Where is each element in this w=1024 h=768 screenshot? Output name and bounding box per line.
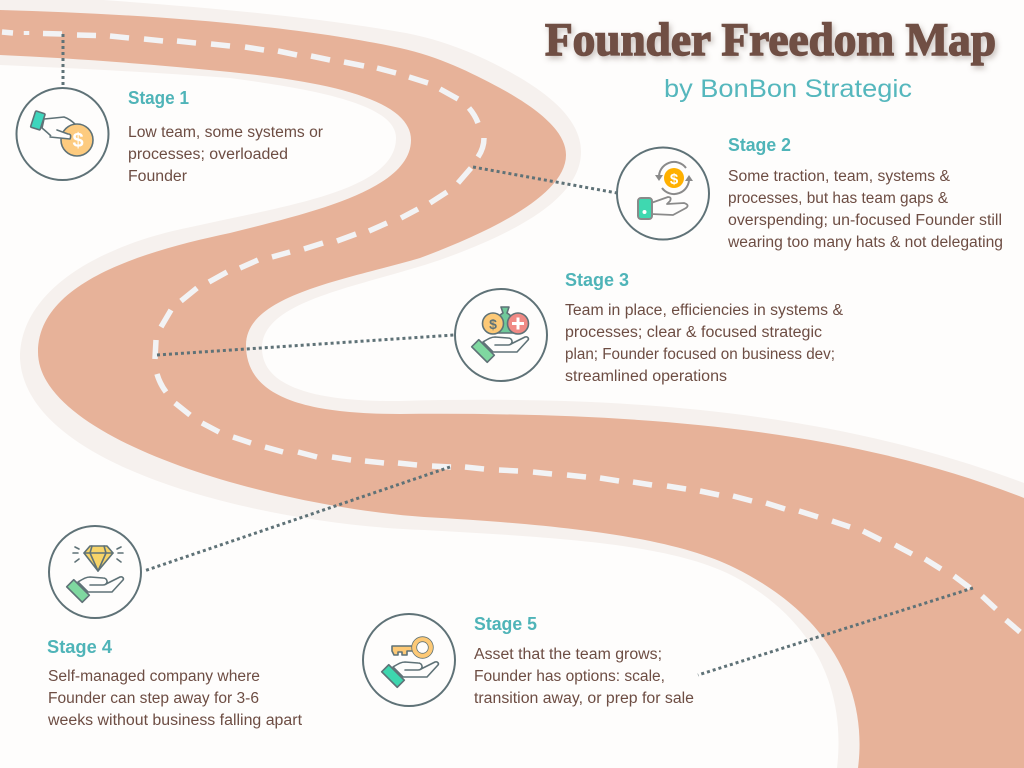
text: stage 2 description: Some traction, team, systems & [728,168,951,185]
text: stage 3 description: processes; clear & focused strategic [565,324,822,341]
icon: hand with phone and cycling coin [617,148,709,240]
text: stage 4 description: Self-managed company where [48,668,260,685]
icon: hand with money bag and coins: $ [489,316,497,332]
connector: stage 2 [473,167,617,193]
panel: stage 4 [47,526,303,729]
text: stage 3 description [565,302,844,385]
icon: hand placing coin: $ [72,130,84,152]
text: stage 3 description: plan; Founder focused on business dev; [565,346,835,363]
heading: stage 3: Stage 3 [565,270,629,290]
text: stage 5 description: Asset that the team grows; [474,646,662,663]
text: stage 2 description: overspending; un-focused Founder still [728,212,1002,229]
text: stage 3 description: Team in place, efficiencies in systems & [565,302,844,319]
text: stage 4 description: Founder can step away for 3-6 [48,690,259,707]
heading: stage 4: Stage 4 [47,637,112,657]
text: stage 5 description: transition away, or prep for sale [474,690,694,707]
text: stage 5 description: Founder has options: scale, [474,668,665,685]
icon: hand with diamond [49,526,141,618]
panel: stage 1 [16,88,323,185]
connector: stage 4 [144,467,450,571]
icon: hand with money bag and coins [455,289,547,381]
heading: stage 5: Stage 5 [474,614,537,634]
text: stage 1 description [128,124,323,185]
title: Founder Freedom Map [545,14,996,66]
text: stage 4 description [47,668,303,729]
text: stage 2 description: processes, but has team gaps & [728,190,949,207]
panel: stage 2 [617,135,1003,251]
panel: stage 5 [363,614,694,707]
text: stage 3 description: streamlined operations [565,368,727,385]
heading: stage 1: Stage 1 [128,88,189,108]
connector: stage 1 [62,34,64,88]
text: stage 1 description: Founder [128,168,187,185]
text: stage 2 description [727,168,1003,251]
road centre dashes [2,31,1020,632]
icon: hand with phone and cycling coin: $ [670,171,679,188]
subtitle: by BonBon Strategic [664,75,912,103]
text: stage 5 description [474,646,694,707]
connector: stage 5 [698,588,973,675]
text: stage 2 description: wearing too many hats & not delegating [727,234,1003,251]
icon: hand with key [363,614,455,706]
text: stage 1 description: Low team, some systems or [128,124,323,141]
connector: stage 3 [157,335,454,355]
heading: stage 2: Stage 2 [728,135,791,155]
text: stage 4 description: weeks without business falling apart [47,712,303,729]
text: stage 1 description: processes; overloaded [128,146,288,163]
panel: stage 3 [455,270,844,385]
icon: hand placing coin [16,88,108,180]
